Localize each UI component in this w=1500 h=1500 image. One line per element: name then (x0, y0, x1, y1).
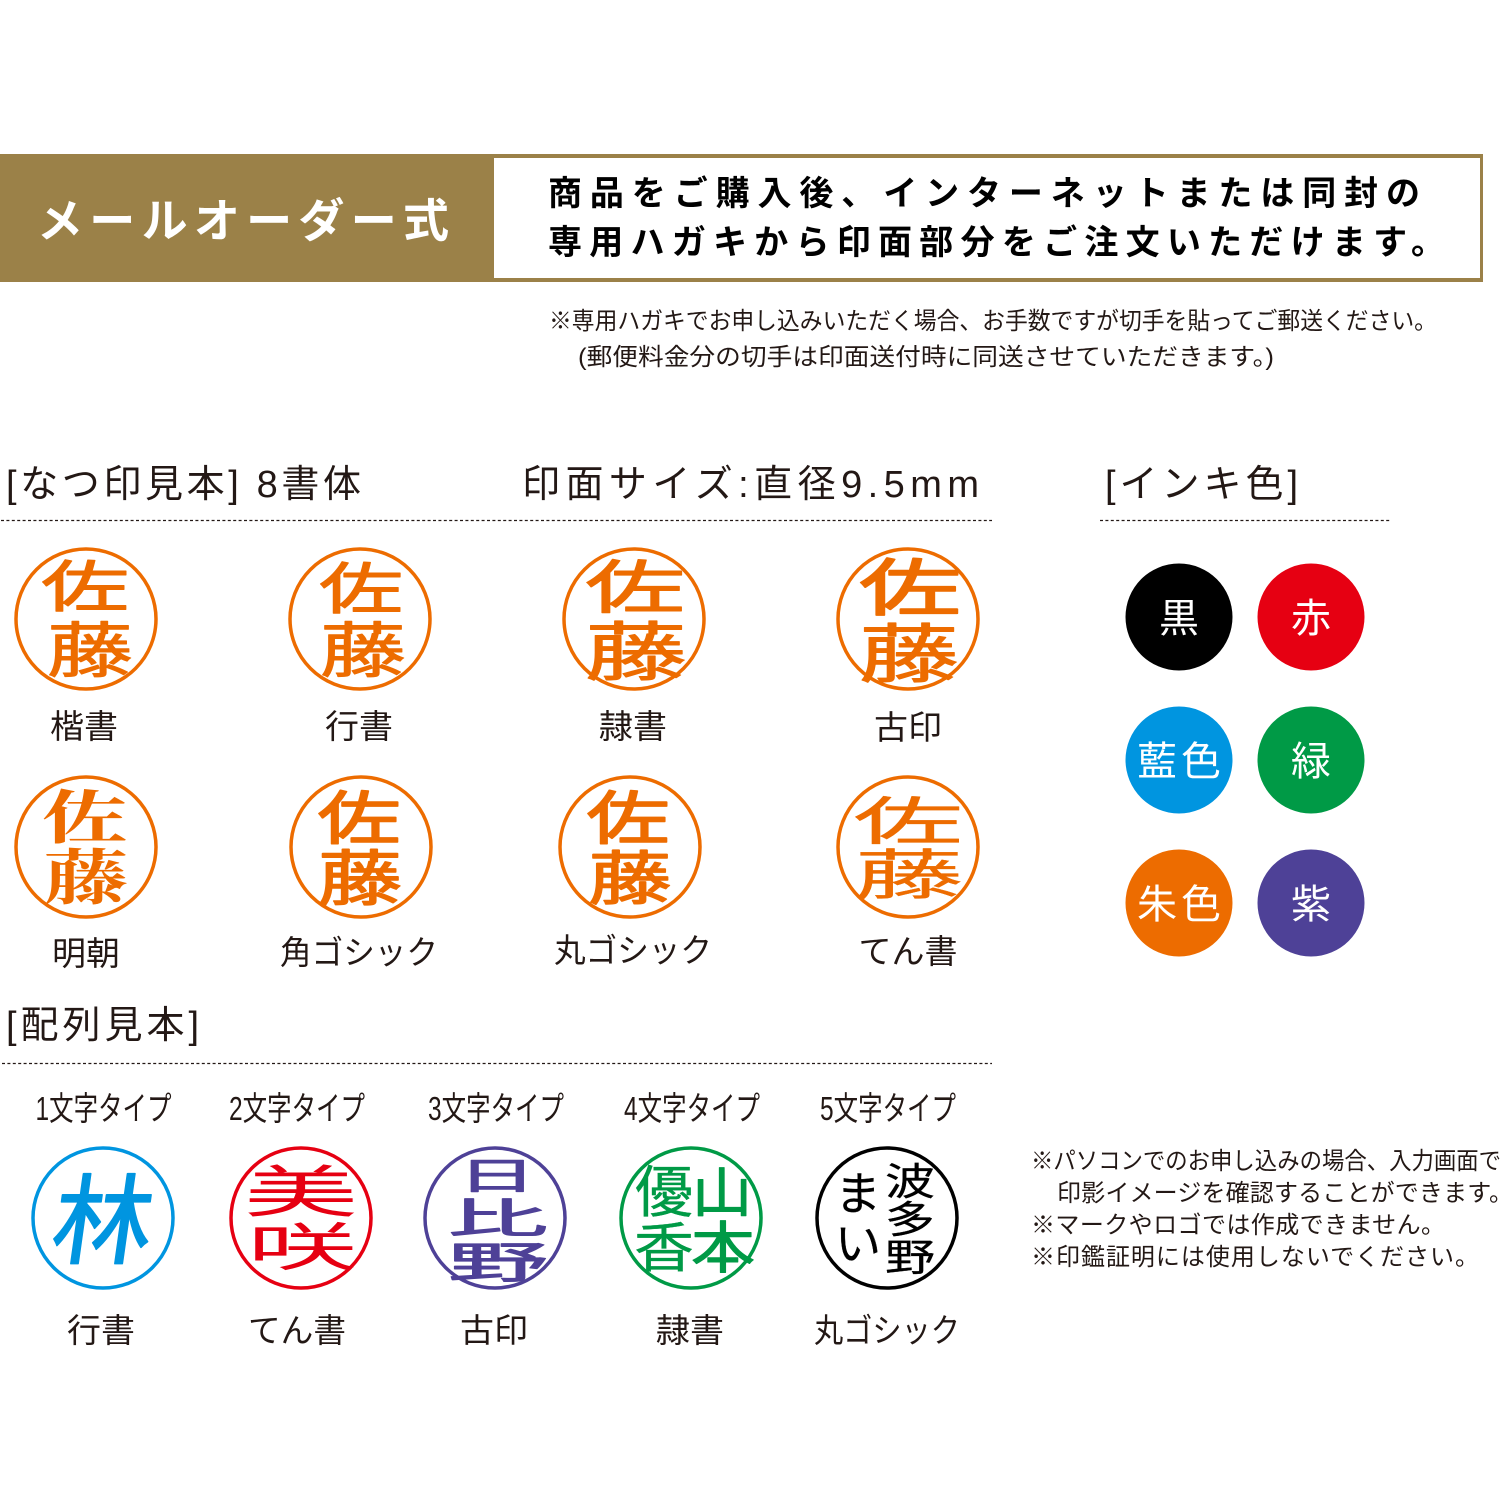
banner description: 専用ハガキから印面部分をご注文いただけます。 (548, 224, 1445, 262)
sample: five characters: い (835, 1218, 881, 1270)
heading: stamp size: 印面サイズ:直径9.5mm (522, 464, 979, 506)
stamp: gyosho: 行書 (325, 708, 393, 745)
postage note (549, 308, 1437, 371)
sample: five characters (814, 1090, 960, 1349)
stamp: mincho: 佐 (42, 786, 128, 851)
sample: five characters: 丸ゴシック (814, 1312, 960, 1349)
ink: red (1258, 564, 1364, 670)
sample: one character: 1文字タイプ (36, 1090, 172, 1127)
panel: ink colours (1126, 564, 1364, 956)
stamp: tensho: 佐 (853, 794, 963, 852)
heading: layout samples: [配列見本] (6, 1005, 199, 1047)
sample: four characters (621, 1090, 761, 1349)
ink: purple (1258, 850, 1364, 956)
stamp: maru gothic: 丸ゴシック (554, 932, 712, 969)
stamp: kaisho: 楷書 (50, 708, 118, 745)
stamp: koin: 藤 (859, 619, 959, 691)
ink: indigo: 藍色 (1137, 740, 1221, 784)
sample: four characters: 4文字タイプ (624, 1090, 760, 1127)
sample: three characters: 古印 (460, 1312, 528, 1349)
postage note: ※専用ハガキでお申し込みいただく場合、お手数ですが切手を貼ってご郵送ください。 (549, 308, 1437, 335)
sample: five characters: 5文字タイプ (820, 1090, 956, 1127)
postage note: (郵便料金分の切手は印面送付時に同送させていただきます。) (578, 344, 1274, 371)
notes: ordering cautions: ※マークやロゴでは作成できません。 (1031, 1212, 1445, 1239)
ink: green: 緑 (1291, 740, 1331, 784)
sample: two characters: てん書 (248, 1312, 346, 1349)
stamp: gyosho (290, 549, 430, 745)
sample: four characters: 香 (634, 1219, 694, 1279)
stamp: kaisho (16, 549, 156, 745)
sample: five characters: ま (835, 1168, 881, 1220)
stamp: reisho: 藤 (585, 617, 687, 689)
stamp: kaisho: 藤 (47, 618, 133, 685)
sample: three characters: 比 (448, 1196, 548, 1242)
panel: layout samples (33, 1090, 960, 1349)
sample: five characters: 波 (885, 1162, 935, 1204)
banner description: 商品をご購入後、インターネットまたは同封の (548, 175, 1420, 213)
sample: four characters: 本 (691, 1217, 755, 1280)
stamp: mincho: 明朝 (52, 935, 120, 972)
banner white text box (494, 158, 1480, 278)
notes: ordering cautions: 印影イメージを確認することができます。 (1057, 1180, 1500, 1207)
stamp: tensho (838, 777, 978, 970)
stamp: mincho: 藤 (44, 846, 128, 912)
stamp: kaku gothic: 佐 (318, 787, 400, 852)
heading: ink colours: [インキ色] (1105, 464, 1298, 506)
sample: three characters: 3文字タイプ (428, 1090, 564, 1127)
stamp: kaku gothic: 藤 (318, 846, 402, 913)
notes: ordering cautions (1031, 1148, 1500, 1271)
stamp: tensho: 藤 (854, 846, 964, 906)
stamp: gyosho: 藤 (320, 618, 406, 685)
sample: four characters: 優 (635, 1161, 693, 1224)
sample: five characters: 多 (885, 1200, 935, 1242)
stamp: tensho: てん書 (858, 933, 958, 970)
sample: five characters: 野 (885, 1238, 935, 1280)
banner title: メールオーダー式 (37, 195, 449, 247)
stamp: reisho (564, 549, 704, 745)
stamp: reisho: 佐 (585, 556, 685, 621)
panel: typeface samples (16, 549, 978, 972)
sample: one character: 林 (46, 1167, 161, 1277)
ink: vermilion (1126, 850, 1232, 956)
stamp: koin: 佐 (859, 555, 961, 624)
notes: ordering cautions: ※印鑑証明には使用しないでください。 (1031, 1244, 1479, 1271)
banner gold background panel (0, 154, 1483, 282)
sample: two characters: 2文字タイプ (229, 1090, 365, 1127)
ink: vermilion: 朱色 (1137, 883, 1221, 927)
sample: four characters: 山 (692, 1164, 752, 1224)
sample: three characters: 日 (458, 1156, 536, 1197)
stamp: maru gothic (554, 777, 712, 969)
stamp: reisho: 隷書 (599, 708, 667, 745)
stamp: koin: 古印 (874, 709, 942, 746)
sample: one character (33, 1090, 173, 1349)
banner description (548, 175, 1445, 262)
ink: black: 黒 (1159, 597, 1199, 641)
stamp: gyosho: 佐 (319, 558, 403, 621)
sample: two characters (229, 1090, 371, 1349)
stamp: kaku gothic (280, 777, 438, 971)
stamp: kaku gothic: 角ゴシック (280, 934, 438, 971)
ink: indigo (1126, 706, 1232, 814)
stamp: mincho (16, 777, 156, 972)
stamp: maru gothic: 藤 (588, 847, 672, 912)
sample: three characters: 野 (448, 1240, 548, 1288)
sample: two characters: 美 (244, 1161, 358, 1224)
sample: four characters: 隷書 (656, 1312, 724, 1349)
stamp: kaisho: 佐 (41, 556, 129, 619)
sample: one character: 行書 (67, 1312, 135, 1349)
heading: stamp samples: [なつ印見本] 8書体 (6, 464, 361, 506)
ink: green (1258, 706, 1364, 814)
stamp: maru gothic: 佐 (586, 787, 670, 852)
ink: red: 赤 (1291, 597, 1331, 641)
stamp: koin (838, 549, 978, 746)
sample: three characters (425, 1090, 565, 1349)
header banner (0, 154, 1483, 282)
ink: purple: 紫 (1291, 883, 1331, 927)
ink: black (1126, 564, 1232, 670)
sample: two characters: 咲 (247, 1220, 357, 1278)
